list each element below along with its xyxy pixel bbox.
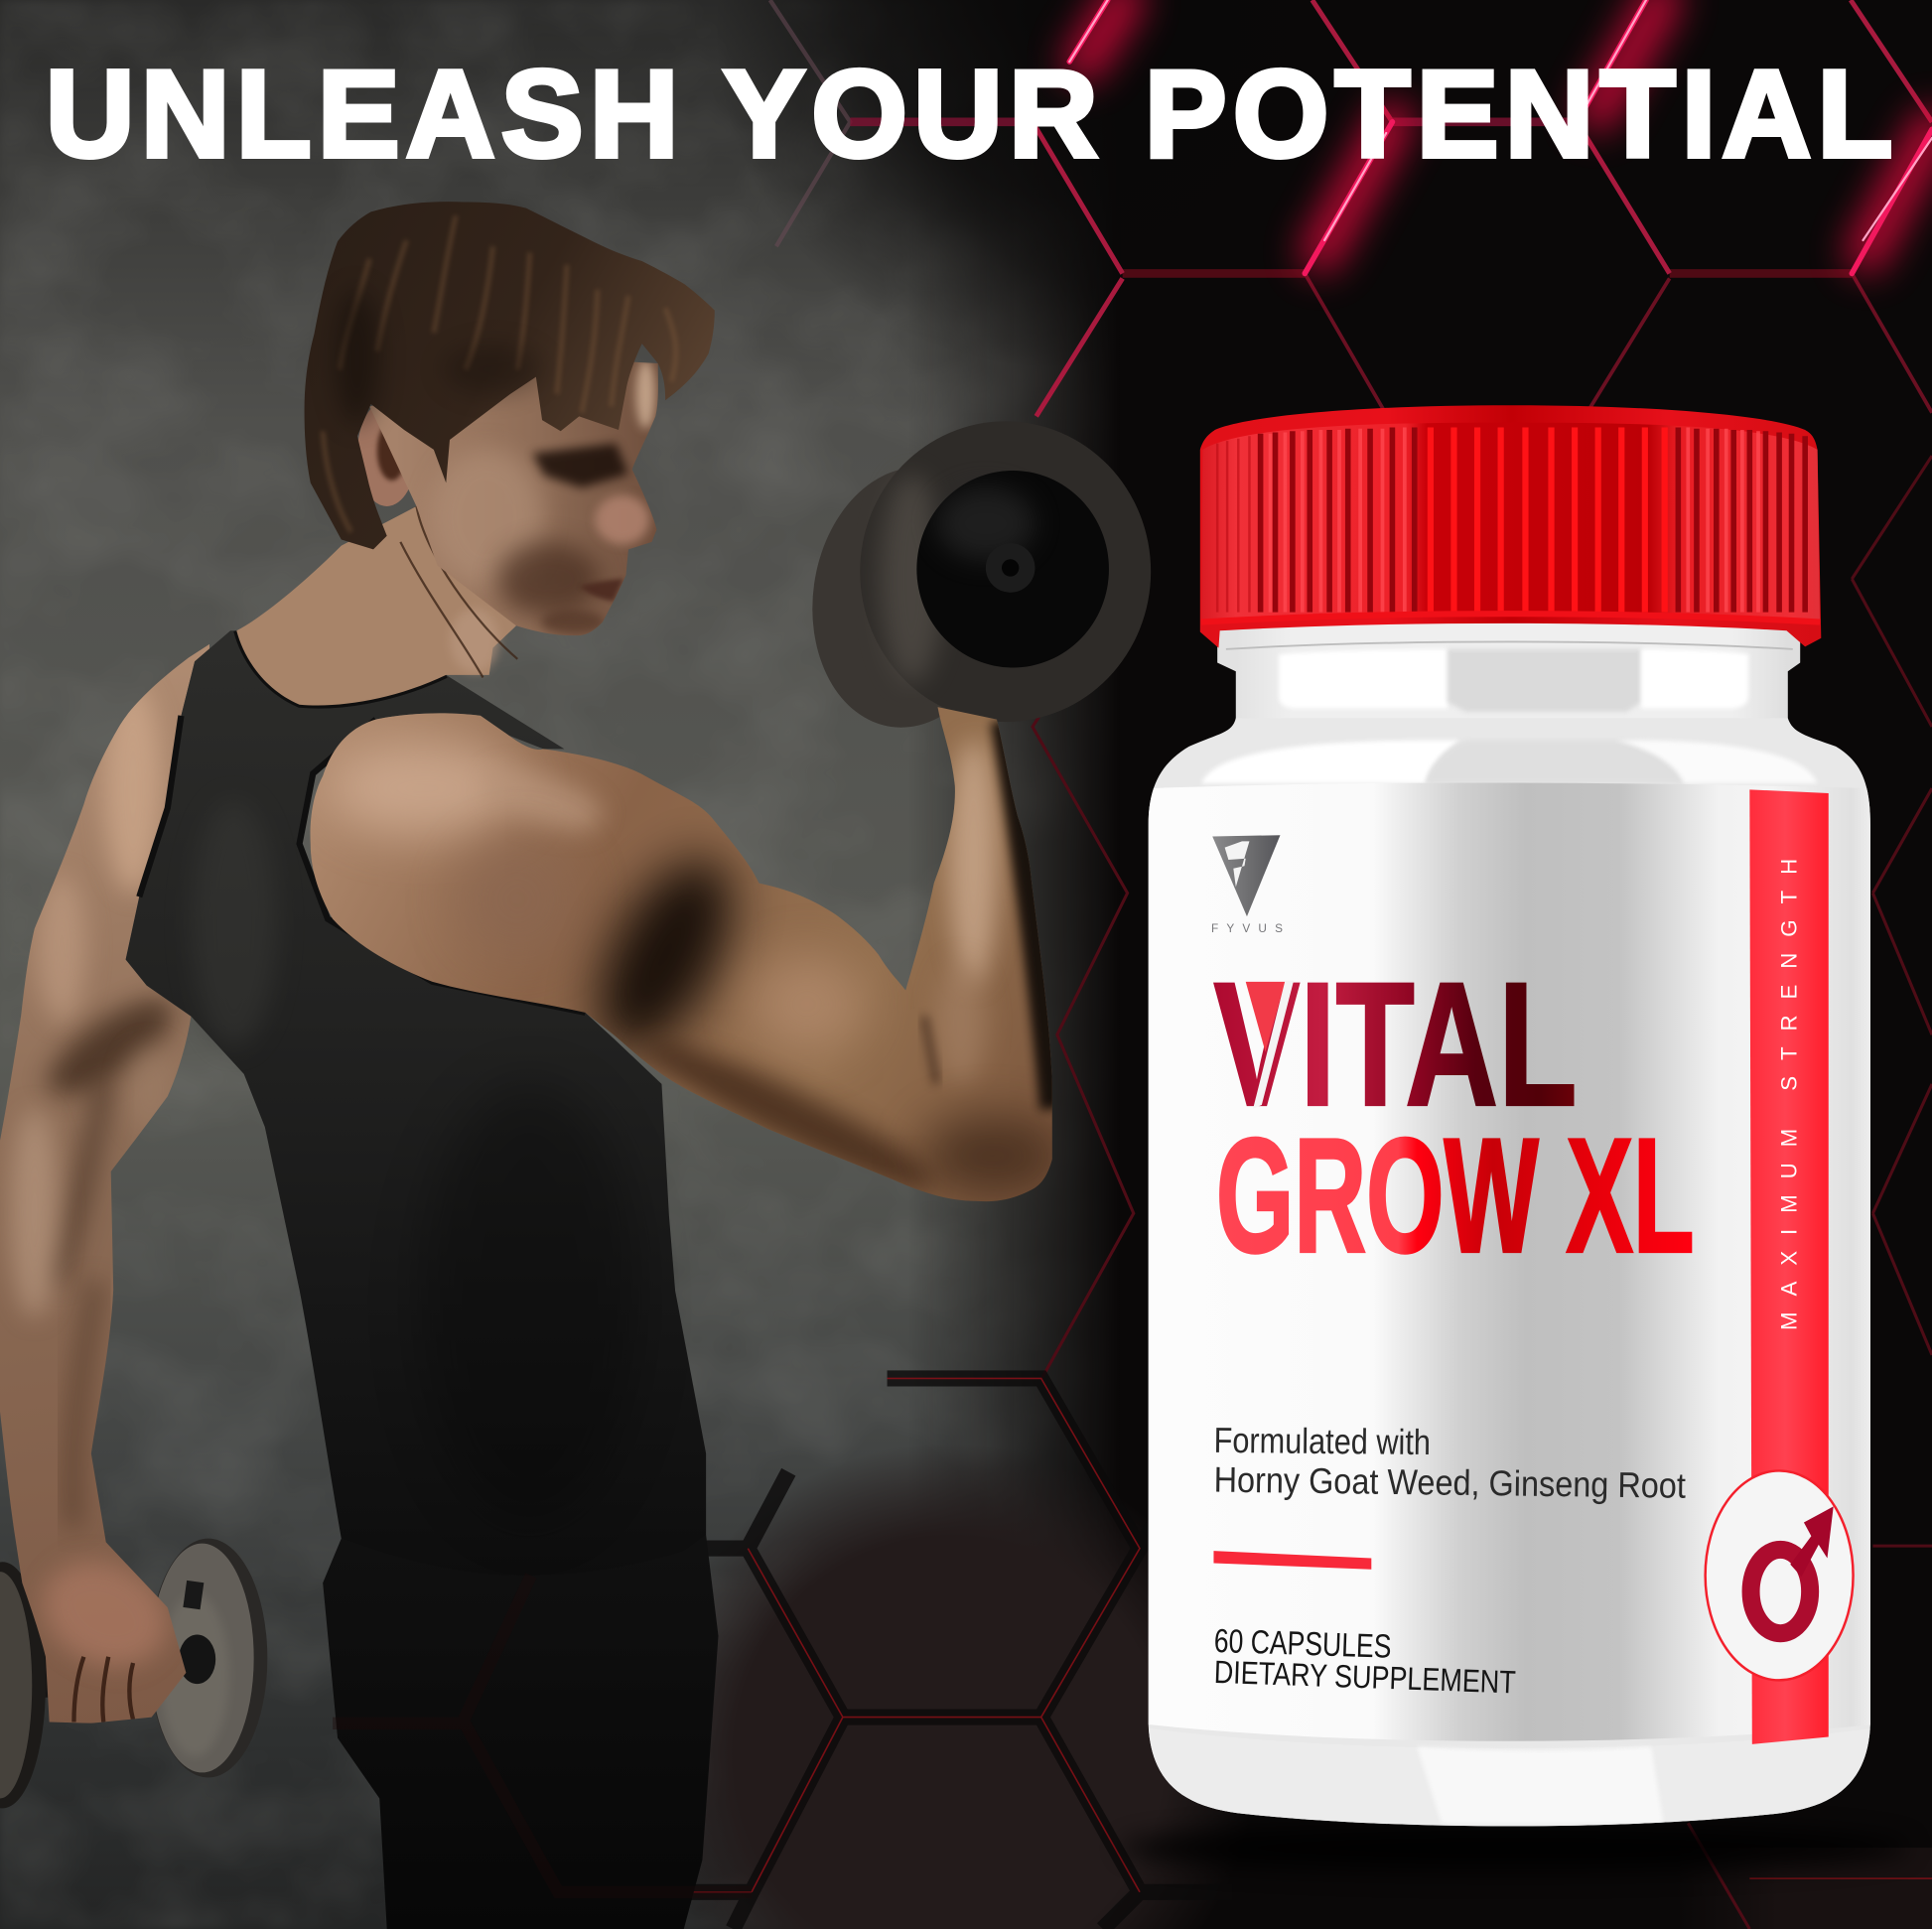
cap ribs	[1261, 428, 1805, 613]
ingredient text: Horny Goat Weed, Ginseng Root	[1213, 1459, 1686, 1506]
product name: vital: VITAL	[1213, 945, 1578, 1143]
ear	[357, 400, 416, 506]
man lifting dumbbell	[0, 202, 1151, 1929]
capsule count: 60 CAPSULES	[1213, 1623, 1392, 1666]
hanging arm and back skin	[0, 616, 209, 1736]
neck	[236, 506, 516, 706]
bottle neck	[1217, 620, 1800, 727]
title: UNLEASH YOUR POTENTIAL	[46, 47, 1892, 184]
dumbbell hub	[179, 1634, 215, 1684]
dumbbell bar	[37, 1648, 198, 1698]
red cap	[1200, 405, 1821, 648]
outer plate	[149, 1539, 267, 1777]
neon glowing hexagon edges	[1069, 0, 1932, 273]
male symbol badge	[1706, 1470, 1854, 1680]
badge ellipse	[1706, 1470, 1854, 1680]
nose	[595, 495, 649, 544]
cheek shadow and lips	[496, 542, 600, 616]
capsule count	[1213, 1623, 1516, 1700]
ingredient text: Formulated with	[1213, 1420, 1431, 1462]
face	[369, 361, 658, 635]
shorts	[323, 1535, 719, 1929]
capsule count: DIETARY SUPPLEMENT	[1213, 1654, 1516, 1700]
red divider bar	[1213, 1551, 1371, 1570]
upper dumbbell	[796, 421, 1151, 740]
bottle shadow	[1121, 1823, 1910, 1872]
male symbol arrow	[1790, 1506, 1834, 1577]
ingredient text	[1213, 1420, 1686, 1506]
inner plate	[0, 1562, 46, 1808]
flexed arm	[290, 696, 1066, 1213]
label surface	[1149, 741, 1872, 1836]
rear plate	[796, 455, 1023, 740]
faint hexagon lines over shorts	[333, 1576, 752, 1892]
hexagon grid lines	[554, 0, 1932, 1929]
bottle body	[1149, 718, 1870, 1826]
logo wordmark: FYVUS	[1211, 922, 1283, 935]
front plate	[860, 421, 1151, 722]
eye socket	[532, 444, 628, 487]
brand logo	[1211, 835, 1283, 935]
tagline: maximum strength: MAXIMUM STRENGTH	[1776, 859, 1801, 1330]
end cap	[916, 471, 1109, 667]
hair	[305, 202, 715, 549]
logo mark	[1212, 835, 1280, 916]
tank top	[126, 630, 706, 1576]
fingers	[73, 1657, 133, 1722]
lower dumbbell	[0, 1539, 267, 1808]
red side stripe	[1749, 789, 1829, 1744]
supplement bottle	[1149, 405, 1872, 1836]
male symbol ring	[1751, 1550, 1810, 1633]
